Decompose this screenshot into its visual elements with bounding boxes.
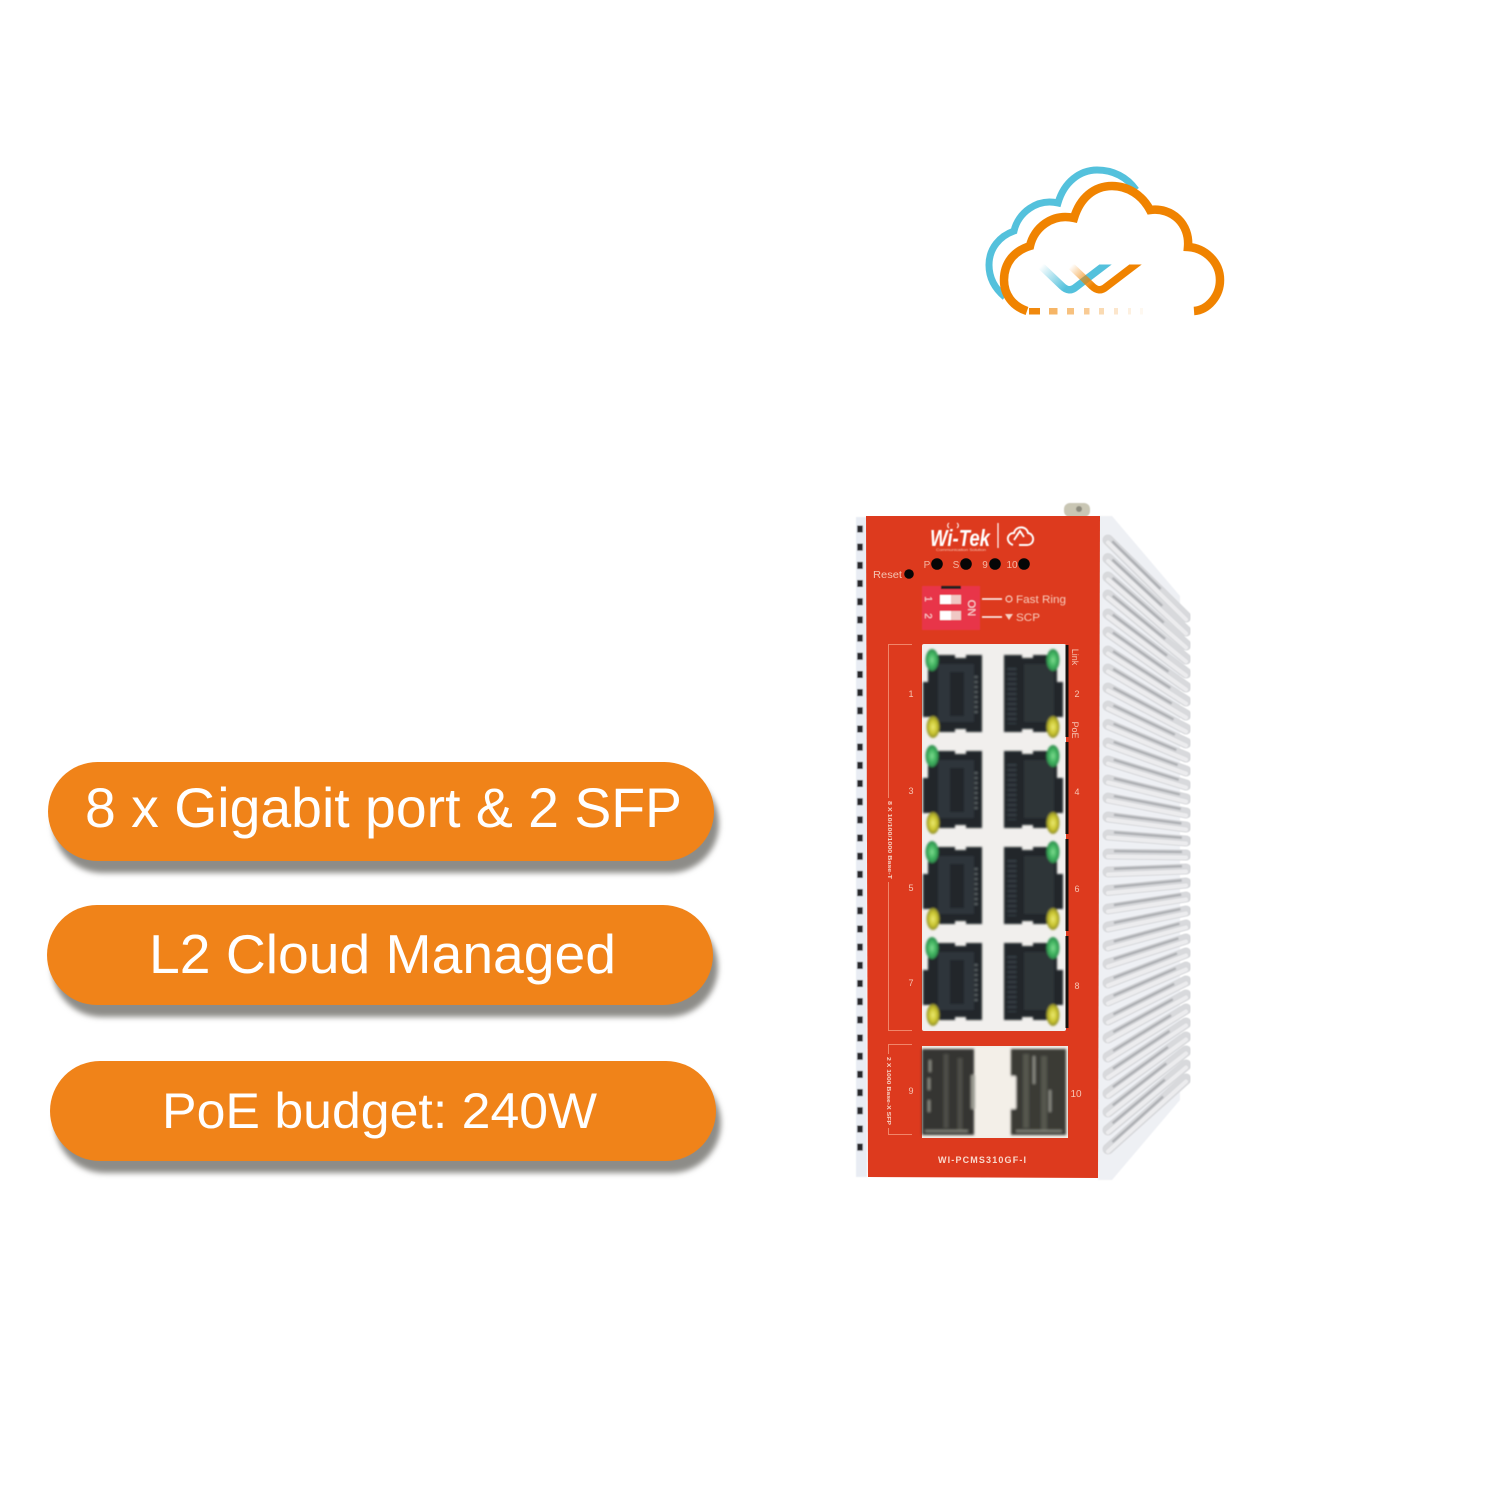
left mounting strip xyxy=(856,517,867,1177)
status indicators: 10 xyxy=(1006,560,1018,571)
port 8 xyxy=(1004,937,1063,1026)
brand logo: Wi-Tek xyxy=(930,525,991,551)
dashed cloud base xyxy=(1029,308,1143,314)
SFP bracket and label xyxy=(884,1044,912,1134)
port 7 xyxy=(923,937,982,1026)
switch labels: SCP xyxy=(1016,612,1040,624)
pill: PoE budget: 240W xyxy=(50,1061,721,1173)
pill: 8 x Gigabit port & 2 SFP: 8 x Gigabit port & 2 SFP xyxy=(85,776,682,839)
DIP switch: ON xyxy=(965,600,977,616)
PoE label: PoE xyxy=(1070,721,1080,739)
mounting screw xyxy=(1064,503,1090,517)
port 2 xyxy=(1004,649,1063,738)
DIP switch xyxy=(922,586,980,630)
port numbers right: 2 xyxy=(1074,689,1080,699)
pill: L2 Cloud Managed: L2 Cloud Managed xyxy=(149,923,616,985)
port 5 xyxy=(923,841,982,930)
pill: PoE budget: 240W: PoE budget: 240W xyxy=(162,1083,598,1139)
port numbers right: 10 xyxy=(1070,1089,1082,1100)
port group bracket and label xyxy=(880,644,912,1030)
SFP bracket and label: 2 X 1000 Base-X SFP xyxy=(885,1057,891,1126)
port numbers left: 7 xyxy=(908,978,914,988)
brand logo xyxy=(930,523,1033,552)
port 6 xyxy=(1004,841,1063,930)
port numbers right: 4 xyxy=(1074,787,1080,797)
SFP port 9 xyxy=(922,1049,975,1135)
orange check mark xyxy=(1070,264,1142,294)
red front panel xyxy=(866,516,1100,1178)
heat sink fins xyxy=(1098,516,1186,1180)
Link label: Link xyxy=(1070,649,1080,666)
device: Wi-Tek industrial switch xyxy=(856,503,1186,1180)
icon: Wi-Tek cloud logo xyxy=(989,170,1220,314)
port numbers left xyxy=(908,689,914,1096)
switch labels xyxy=(982,594,1066,624)
switch labels: Fast Ring xyxy=(1016,594,1066,606)
status indicators xyxy=(873,558,1030,581)
brand logo: Communication Solution xyxy=(936,547,986,552)
port numbers left: 3 xyxy=(908,786,914,796)
port 4 xyxy=(1004,745,1063,834)
DIP switch: 2 xyxy=(922,613,933,619)
pill: 8 x Gigabit port & 2 SFP xyxy=(48,762,719,873)
model number: WI-PCMS310GF-I xyxy=(938,1155,1026,1165)
status indicators: S xyxy=(953,560,960,571)
pill: L2 Cloud Managed xyxy=(47,905,718,1017)
RJ45 ports block xyxy=(922,644,1067,1031)
status indicators: Reset xyxy=(873,570,902,581)
blue check mark xyxy=(1040,264,1112,294)
port group bracket and label: 8 X 10/100/1000 Base-T xyxy=(886,801,892,880)
SFP port 10 xyxy=(1011,1049,1066,1135)
port numbers right: 6 xyxy=(1074,884,1080,894)
port 1 xyxy=(923,649,982,738)
SFP ports xyxy=(922,1046,1068,1138)
port numbers left: 9 xyxy=(908,1086,914,1096)
DIP switch: 1 xyxy=(922,596,933,602)
port numbers left: 5 xyxy=(908,883,914,893)
port numbers left: 1 xyxy=(908,689,914,699)
orange cloud outline xyxy=(1004,186,1220,311)
status indicators: P xyxy=(924,560,931,571)
blue cloud outline xyxy=(989,170,1136,297)
status indicators: 9 xyxy=(982,560,988,571)
port 3 xyxy=(923,745,982,834)
port numbers right xyxy=(1070,689,1082,1100)
port numbers right: 8 xyxy=(1074,981,1080,991)
